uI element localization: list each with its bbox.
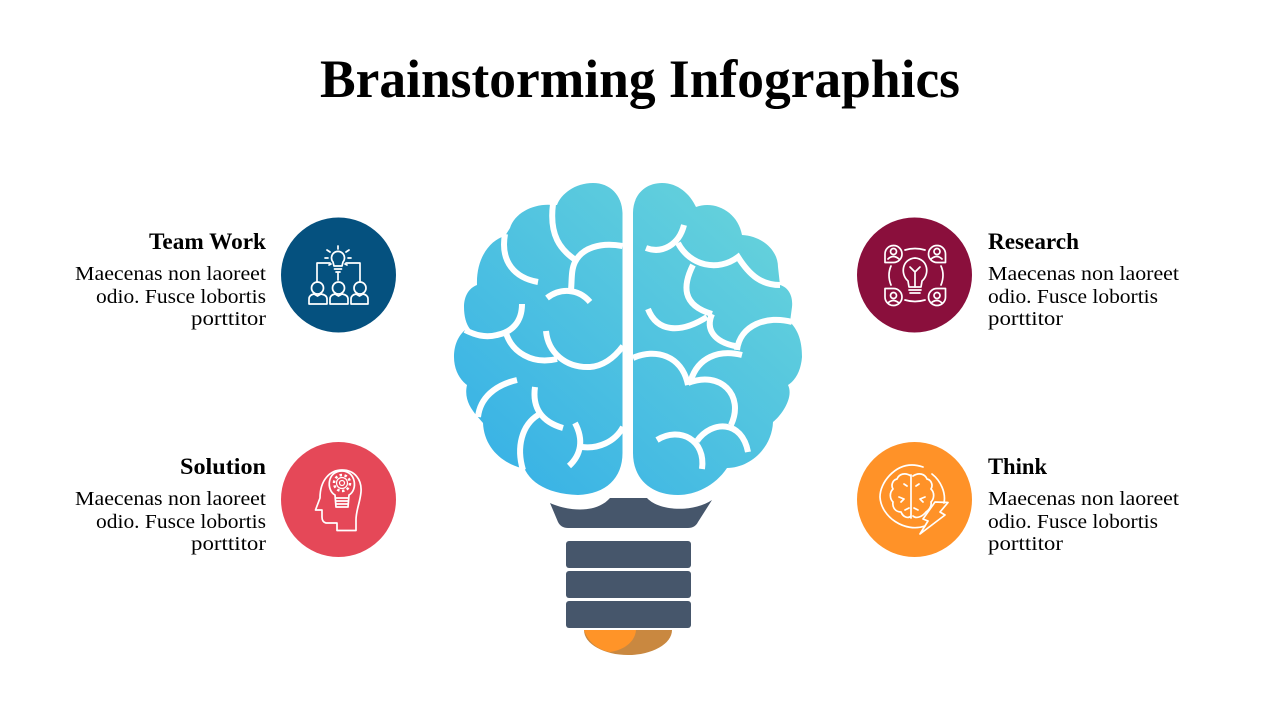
bulb socket (550, 498, 712, 528)
heading: research: Research (988, 229, 1079, 254)
heading: think: Think (988, 454, 1047, 479)
bulb base glow cap (584, 630, 672, 655)
panel: team work (75, 218, 396, 332)
icon: head with gear bulb (281, 442, 396, 557)
icon: team with idea (281, 218, 396, 332)
icon: brain with lightning (857, 442, 972, 557)
left brain hemisphere (454, 183, 623, 495)
icon: idea network (857, 218, 972, 332)
text block: think: porttitor (988, 533, 1063, 555)
title: Brainstorming Infographics (320, 49, 960, 109)
text block: solution: odio. Fusce lobortis (96, 511, 266, 533)
text block: think: Maecenas non laoreet (988, 488, 1179, 510)
panel: think (857, 442, 1184, 557)
text block: solution: Maecenas non laoreet (75, 488, 266, 510)
heading: solution: Solution (180, 454, 266, 479)
text block: think: odio. Fusce lobortis (988, 511, 1158, 533)
text block: team work: Maecenas non laoreet (75, 263, 266, 285)
text block: research: porttitor (988, 308, 1063, 330)
text block: team work: odio. Fusce lobortis (96, 286, 266, 308)
text block: research: odio. Fusce lobortis (988, 286, 1158, 308)
brain and light bulb illustration (454, 183, 802, 655)
heading: team work: Team Work (149, 229, 266, 254)
text block: team work: porttitor (191, 308, 266, 330)
panel: research (857, 218, 1184, 332)
right brain hemisphere (633, 183, 802, 495)
text block: solution: porttitor (191, 533, 266, 555)
bulb screw bands (566, 541, 691, 628)
text block: research: Maecenas non laoreet (988, 263, 1179, 285)
panel: solution (75, 442, 396, 557)
